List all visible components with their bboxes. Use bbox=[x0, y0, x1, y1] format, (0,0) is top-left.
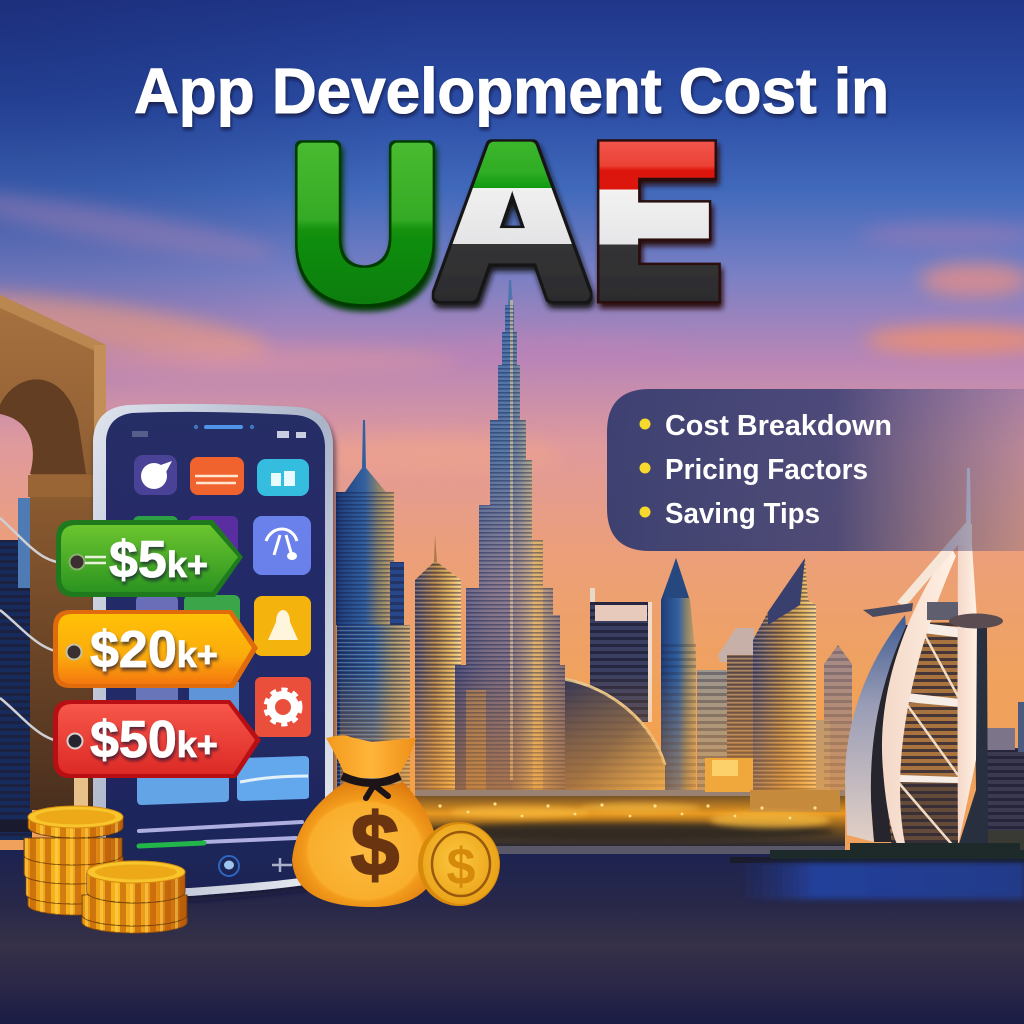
price tag orange bbox=[0, 610, 258, 688]
sky disc bbox=[949, 614, 1003, 628]
bag tie bbox=[342, 776, 400, 798]
coin stack right bbox=[82, 861, 187, 933]
island base bbox=[850, 843, 1020, 858]
tower: low block bbox=[697, 670, 727, 790]
phone screen bbox=[106, 412, 325, 888]
list item: saving tips: Saving Tips bbox=[665, 498, 820, 530]
UAE flag lettering bbox=[291, 102, 720, 342]
letter U: U bbox=[291, 103, 439, 342]
top brace bbox=[897, 520, 972, 607]
app icon row 2 bbox=[133, 516, 311, 575]
city glow bbox=[340, 670, 860, 795]
app icon: chat bbox=[134, 455, 177, 495]
distant city left bbox=[0, 498, 32, 840]
mast bbox=[966, 468, 971, 525]
Burj Khalifa bbox=[455, 280, 565, 790]
progress bars bbox=[139, 822, 302, 846]
arch left bbox=[0, 295, 106, 832]
bag neck bbox=[326, 735, 416, 778]
money bag bbox=[292, 735, 438, 907]
app icon row 3 bbox=[136, 595, 311, 656]
tower: mushroom cap bbox=[718, 628, 754, 790]
blue tiles bbox=[137, 756, 309, 805]
facade bbox=[887, 622, 958, 848]
price tag green: $5k+ bbox=[109, 531, 208, 589]
dome building bbox=[556, 678, 665, 790]
tower: behind right bbox=[812, 645, 852, 790]
price tag red: $50k+ bbox=[90, 711, 218, 769]
app icon: cyan bbox=[257, 459, 309, 496]
list item: cost breakdown: Cost Breakdown bbox=[665, 410, 892, 442]
back column bbox=[957, 628, 988, 850]
coin stack left bbox=[24, 806, 123, 915]
lit promenade and trees bbox=[405, 758, 845, 854]
helipad bbox=[863, 603, 913, 617]
gold coin: $ bbox=[447, 838, 476, 896]
gold coin bbox=[418, 822, 500, 906]
tower: gold left bbox=[415, 534, 461, 790]
white rib bbox=[882, 546, 956, 852]
info panel bbox=[607, 389, 1024, 551]
price tag orange: $20k+ bbox=[90, 621, 218, 679]
Burj Al Arab bbox=[845, 468, 1020, 858]
bag dollar sign: $ bbox=[351, 795, 399, 894]
tower: flat top bbox=[590, 588, 652, 722]
phone bbox=[93, 404, 333, 896]
dark window strip bbox=[870, 625, 918, 842]
tower: far left blue bbox=[336, 420, 410, 790]
right waterfront bbox=[730, 830, 1024, 899]
tower: striped gold bbox=[753, 558, 816, 790]
tower: blue spire right bbox=[661, 558, 696, 790]
skyline towers bbox=[336, 280, 852, 790]
bag body bbox=[292, 782, 438, 907]
upper block bbox=[927, 602, 958, 620]
price tag red bbox=[0, 698, 261, 778]
list item: pricing factors: Pricing Factors bbox=[665, 454, 868, 486]
price tag green bbox=[0, 518, 243, 597]
status bar bbox=[132, 425, 306, 438]
nav icons bbox=[219, 856, 292, 876]
water and foreground bbox=[0, 850, 1024, 1024]
phone frame bbox=[93, 404, 333, 896]
letter E: E bbox=[592, 103, 720, 341]
facade braces bbox=[898, 630, 960, 848]
letter A: A bbox=[435, 102, 590, 341]
right distant buildings bbox=[985, 702, 1024, 838]
sail bbox=[845, 615, 906, 842]
main column bbox=[958, 545, 977, 846]
sunset clouds bbox=[0, 180, 1024, 475]
title: App Development Cost in bbox=[134, 55, 889, 127]
app icon: gear bbox=[136, 677, 311, 737]
app icon: orange bbox=[190, 457, 244, 495]
